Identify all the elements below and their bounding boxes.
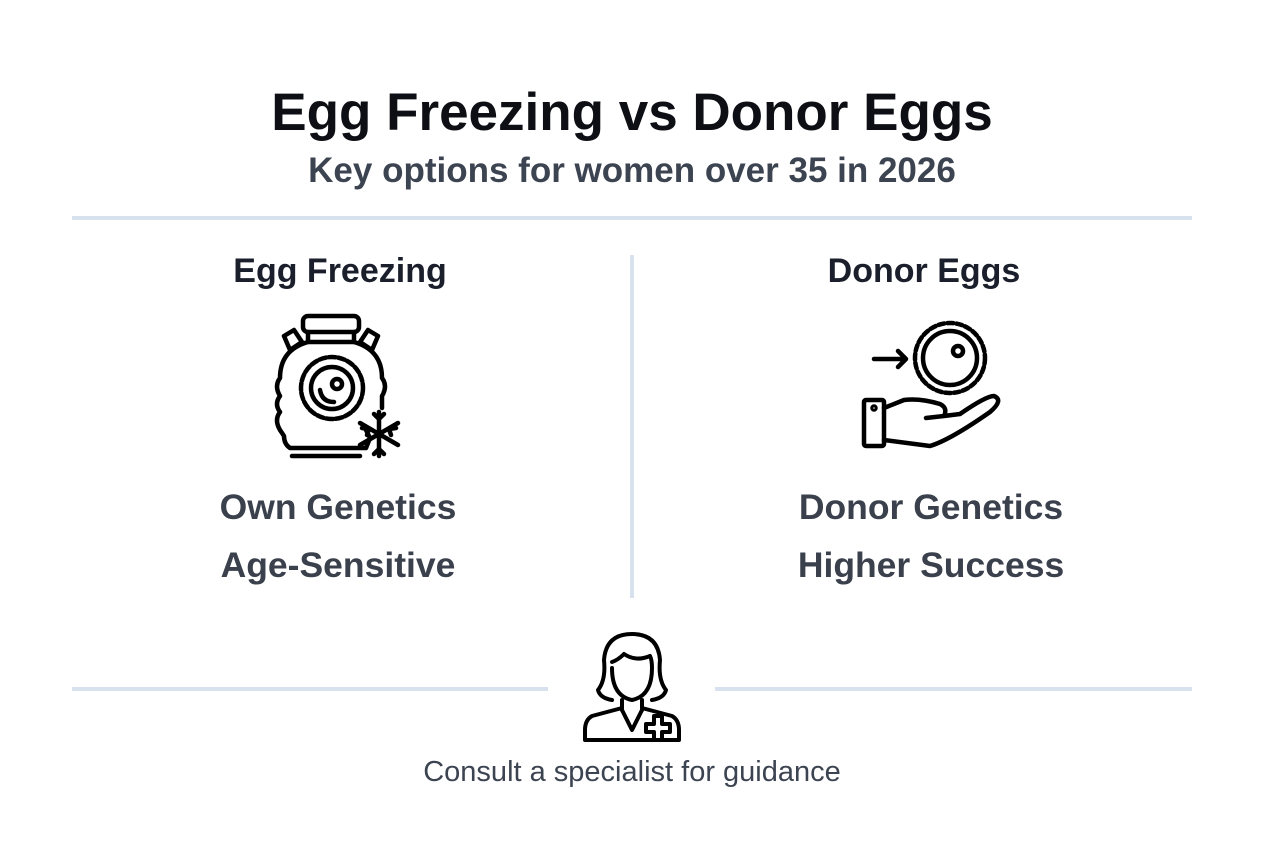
title: Egg Freezing vs Donor Eggs: [271, 83, 993, 142]
panel: egg freezing: [220, 252, 456, 585]
subtitle: Key options for women over 35 in 2026: [308, 151, 956, 190]
icon: doctor: [583, 632, 681, 742]
text: own genetics: Own Genetics: [220, 487, 456, 527]
text: donor genetics: Donor Genetics: [799, 487, 1063, 527]
text: higher success: Higher Success: [798, 545, 1064, 585]
icon: hand with egg: [862, 320, 1000, 448]
heading: egg freezing: Egg Freezing: [233, 252, 447, 290]
footer text: Consult a specialist for guidance: [423, 756, 841, 788]
text: age-sensitive: Age-Sensitive: [221, 545, 455, 585]
heading: donor eggs: Donor Eggs: [828, 252, 1020, 290]
panel: donor eggs: [798, 252, 1064, 585]
icon: frozen egg container: [274, 314, 400, 458]
